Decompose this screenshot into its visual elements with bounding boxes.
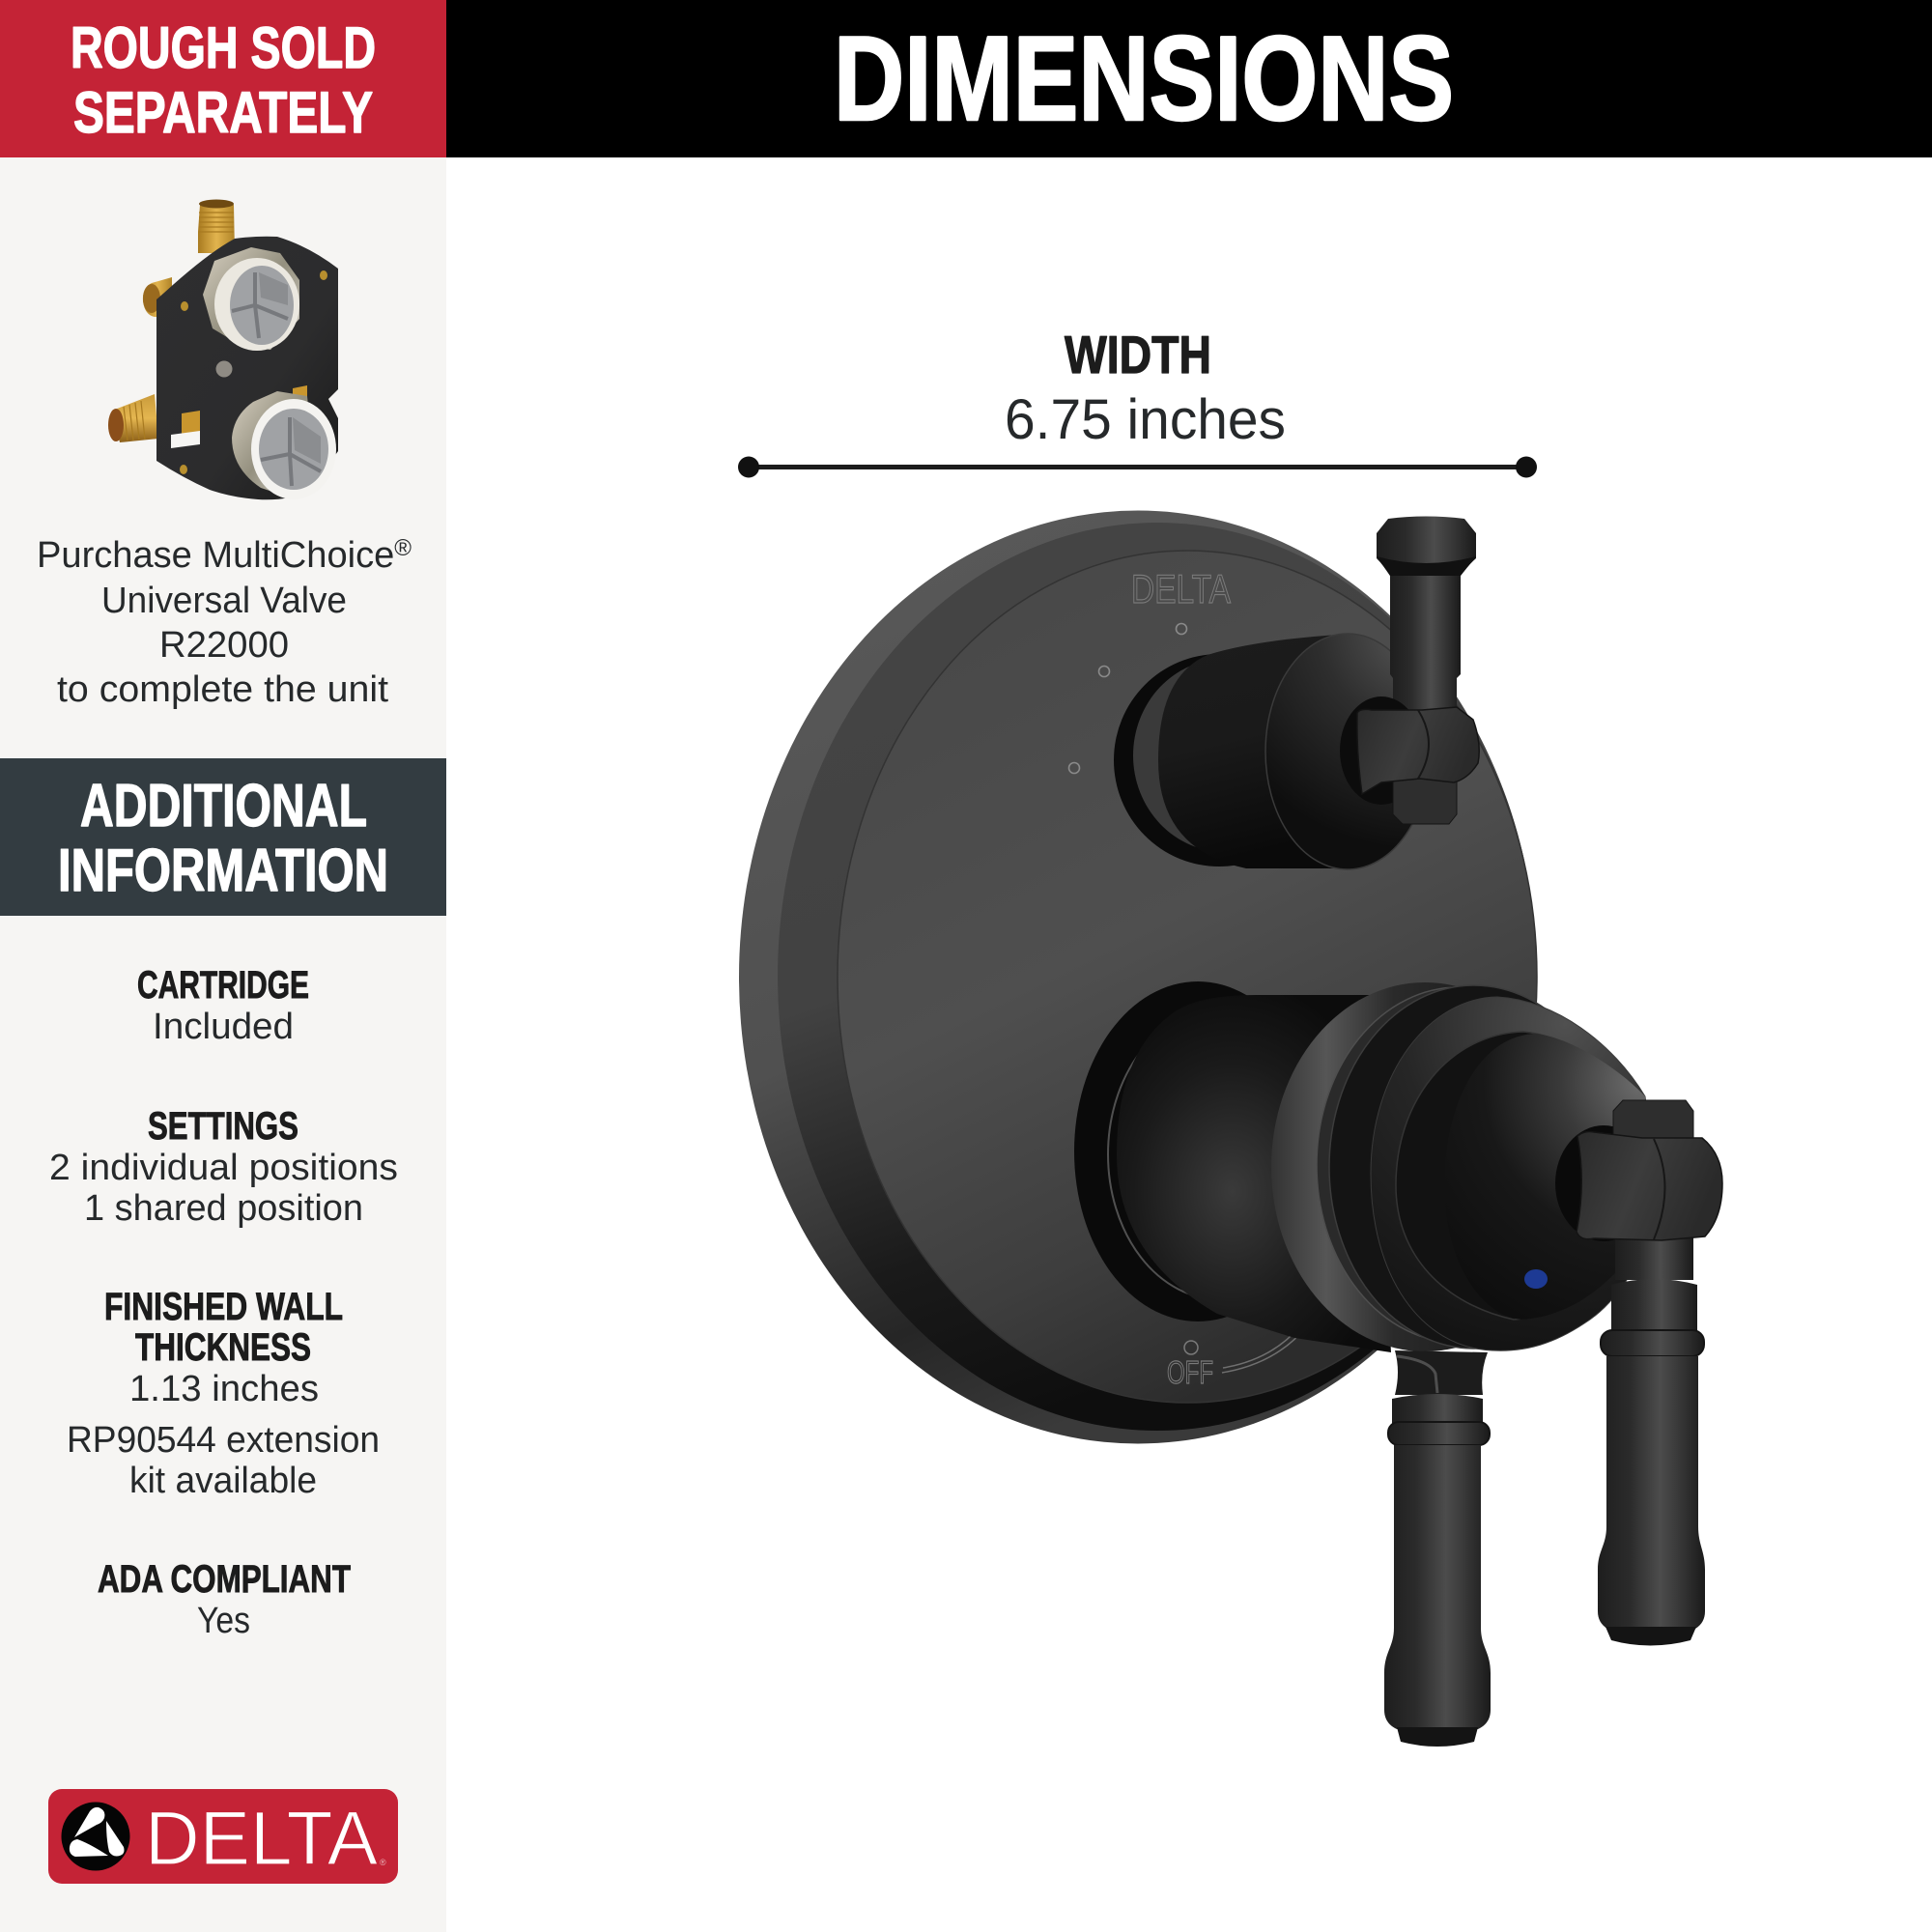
- plate engraved brand: DELTA: [1131, 566, 1231, 611]
- upper handle lower nub: [1393, 778, 1457, 824]
- lower knob base: [1074, 981, 1321, 1321]
- rear lever ring: [1601, 1330, 1704, 1356]
- spec label line 2: THICKNESS: [135, 1326, 311, 1369]
- spec label: CARTRIDGE: [137, 964, 309, 1007]
- rear lever hub nub: [1613, 1100, 1693, 1140]
- lower knob head rim: [1371, 997, 1662, 1350]
- lower knob cap: [1444, 1034, 1660, 1320]
- plate indicator dots: [1068, 624, 1186, 773]
- upper handle: [1340, 516, 1479, 824]
- valve lower port: [232, 391, 336, 499]
- banner: rough sold separately: [0, 0, 446, 157]
- rear lever neck: [1615, 1236, 1693, 1280]
- valve lower left pipe: [108, 394, 158, 442]
- trim plate rim: [739, 510, 1537, 1443]
- spec label: ADA COMPLIANT: [98, 1558, 351, 1601]
- upper handle stem: [1390, 575, 1461, 710]
- valve upper port: [203, 247, 299, 351]
- valve center screw: [216, 361, 232, 377]
- banner: dimensions title: [446, 0, 1932, 157]
- upper diverter knob: [1114, 634, 1430, 869]
- plate off marking: OFF: [1167, 1354, 1213, 1390]
- upper handle tip: [1377, 516, 1476, 576]
- banner heading line 1: ADDITIONAL: [80, 773, 367, 839]
- rear lever hub crease: [1654, 1139, 1665, 1239]
- front lever tip: [1397, 1727, 1478, 1747]
- valve plate slot: [171, 431, 200, 448]
- rear lever upper section: [1611, 1279, 1697, 1332]
- logo icon: [62, 1803, 129, 1870]
- plate off marking: [1167, 1327, 1306, 1390]
- front lever upper section: [1392, 1394, 1483, 1426]
- rear lever shaft: [1598, 1356, 1705, 1629]
- front lever: [1384, 1350, 1491, 1747]
- upper handle hub crease: [1418, 710, 1429, 779]
- spec value: Included: [153, 1007, 294, 1047]
- lower thermostatic knob: [1074, 981, 1662, 1352]
- front lever ring: [1388, 1422, 1490, 1445]
- spec value line 2: 1 shared position: [84, 1188, 363, 1229]
- spec note line 2: kit available: [129, 1461, 317, 1501]
- dimension arrow line: [738, 456, 1537, 477]
- upper handle hub: [1357, 707, 1479, 794]
- rear lever dark backing: [1555, 1125, 1652, 1241]
- upper knob body: [1158, 634, 1352, 868]
- spec: cartridge: [137, 964, 309, 1047]
- note line 3: R22000: [159, 625, 289, 666]
- note line 1: ®: [394, 535, 412, 561]
- front lever neck: [1395, 1350, 1488, 1395]
- note line 1: Purchase MultiChoice: [37, 535, 394, 576]
- banner heading line 1: ROUGH SOLD: [71, 15, 376, 80]
- logo: delta: [48, 1789, 398, 1884]
- dimension: width: [738, 325, 1537, 477]
- valve top brass pipe: [198, 199, 235, 253]
- upper knob end cap: [1265, 634, 1430, 869]
- lower knob collar: [1271, 982, 1578, 1351]
- valve upper left pipe: [143, 277, 172, 317]
- lower knob inner ring: [1396, 1032, 1657, 1320]
- note line 2: Universal Valve: [101, 581, 347, 621]
- spec value: 1.13 inches: [129, 1369, 319, 1409]
- spec: finished wall thickness: [67, 1286, 380, 1501]
- panel: left sidebar: [0, 0, 446, 1932]
- spec label: SETTINGS: [148, 1105, 298, 1148]
- logo registered mark: ®: [380, 1858, 386, 1867]
- cold indicator dot: [1524, 1269, 1548, 1289]
- illustration: shower trim product: [739, 510, 1722, 1747]
- lower knob grooves: [1317, 985, 1619, 1349]
- upper handle disc: [1340, 696, 1423, 805]
- banner heading line 2: SEPARATELY: [73, 80, 373, 145]
- spec note line 1: RP90544 extension: [67, 1420, 380, 1461]
- spec label line 1: FINISHED WALL: [104, 1286, 343, 1328]
- rear lever hub: [1577, 1132, 1722, 1240]
- title: DIMENSIONS: [834, 13, 1454, 146]
- spec: ada compliant: [98, 1558, 351, 1641]
- trim plate face: [838, 551, 1537, 1403]
- lower knob body: [1117, 995, 1391, 1352]
- front lever neck highlight: [1397, 1356, 1437, 1393]
- upper knob base: [1114, 654, 1324, 867]
- text: purchase valve note: [37, 535, 412, 710]
- rear lever: [1555, 1100, 1722, 1646]
- valve mounting holes: [180, 270, 327, 474]
- banner: additional information: [0, 758, 446, 916]
- dimension value: 6.75 inches: [1005, 388, 1286, 451]
- illustration: rough valve: [108, 199, 338, 499]
- upper handle collar shadow: [1377, 556, 1476, 576]
- rear lever tip: [1605, 1627, 1696, 1646]
- dimension label: WIDTH: [1065, 325, 1211, 384]
- logo wordmark: DELTA: [145, 1795, 378, 1881]
- spec value: Yes: [197, 1601, 250, 1641]
- note line 4: to complete the unit: [57, 669, 388, 710]
- spec: settings: [49, 1105, 398, 1229]
- valve mounting plate: [156, 237, 338, 499]
- trim plate bevel: [778, 523, 1537, 1431]
- spec value line 1: 2 individual positions: [49, 1148, 398, 1188]
- front lever shaft: [1384, 1445, 1491, 1729]
- valve brass slots: [182, 385, 307, 435]
- banner heading line 2: INFORMATION: [58, 838, 388, 904]
